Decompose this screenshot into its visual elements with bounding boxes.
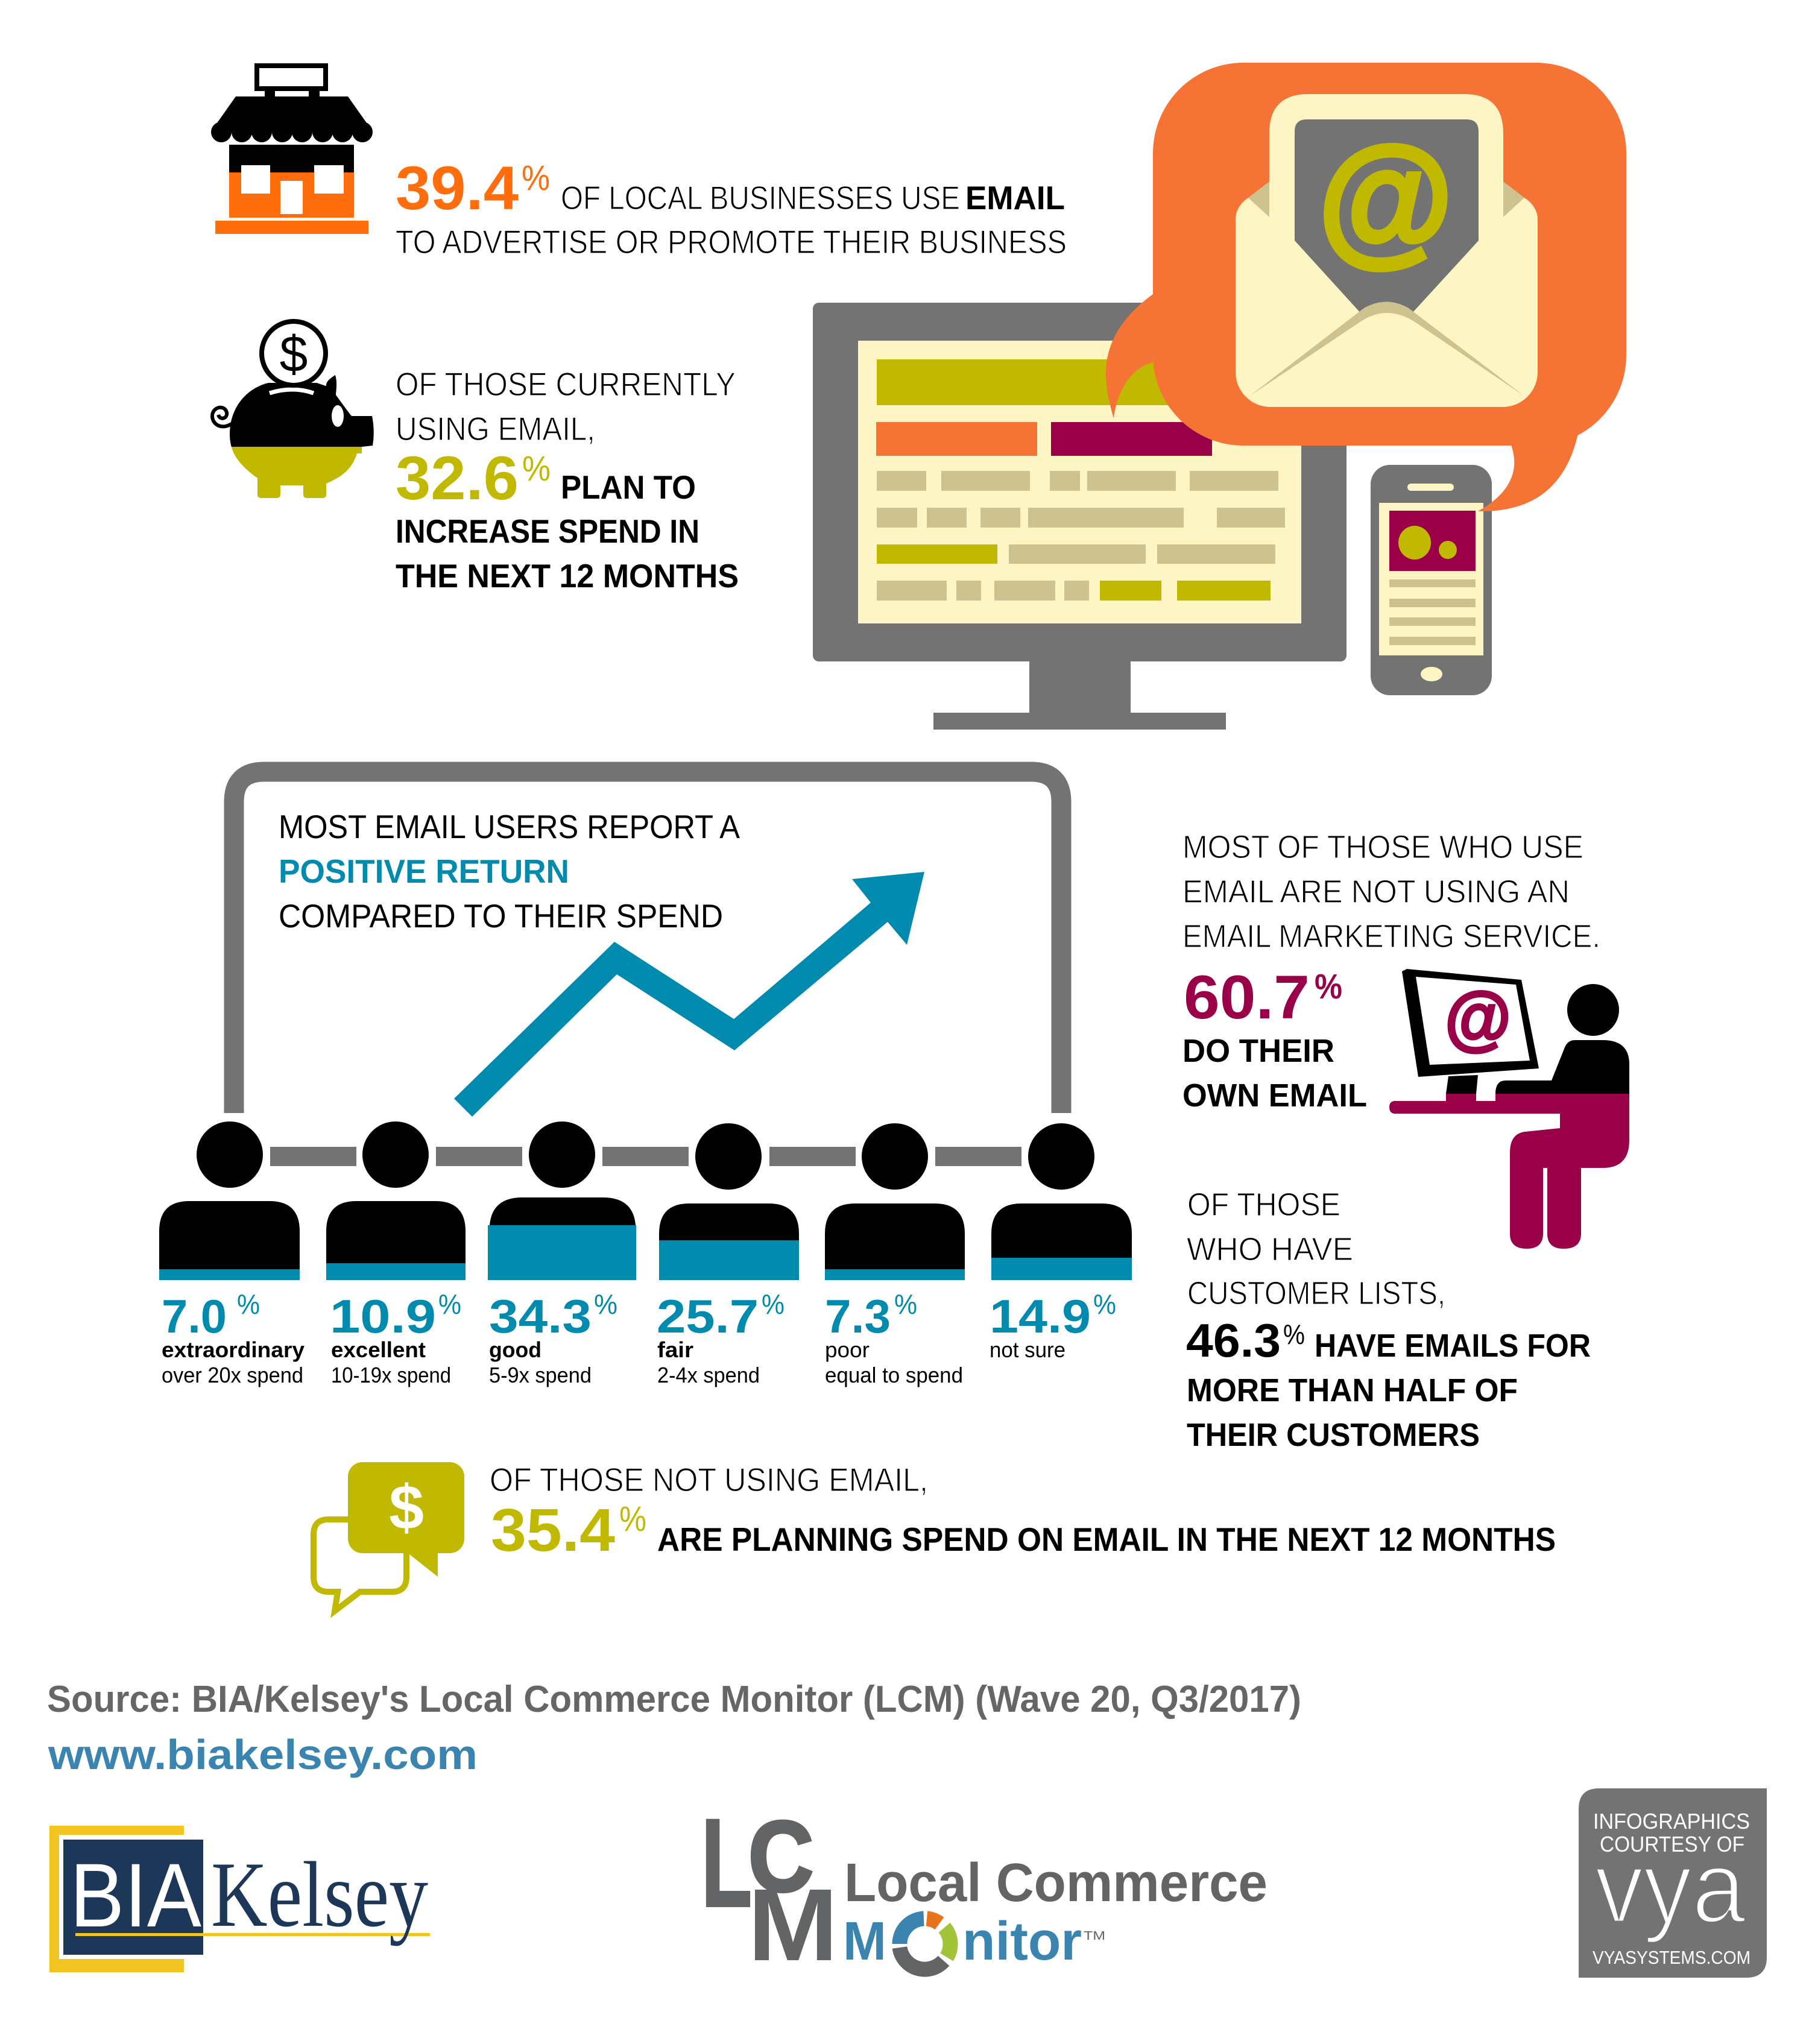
logo: Local Commerce Monitor: M — [748, 1868, 838, 1982]
logo: Local Commerce Monitor: Local Commerce — [844, 1853, 1268, 1913]
icon: storefront — [211, 66, 373, 234]
person: fair 25.7 percent: 25.7 — [657, 1290, 759, 1343]
stat: 46.3 percent have emails: MORE THAN HALF OF — [1187, 1372, 1518, 1408]
person: poor 7.3 percent: poor — [825, 1337, 870, 1362]
logo: VYA badge: VYASYSTEMS.COM — [1593, 1947, 1751, 1968]
person: extraordinary 7.0 percent: % — [237, 1289, 260, 1320]
stat: 46.3 percent have emails: THEIR CUSTOMERS — [1187, 1417, 1480, 1453]
logo: Local Commerce Monitor: C — [748, 1801, 813, 1913]
stat: 32.6 percent plan to increase: OF THOSE CURRENTLY — [396, 365, 736, 403]
stat: 39.4 percent use email: OF LOCAL BUSINESSES USE — [561, 179, 960, 216]
stat: 46.3 percent have emails: 46.3 — [1186, 1314, 1281, 1367]
icon: smartphone — [1371, 465, 1492, 695]
person: extraordinary 7.0 percent: 7.0 — [162, 1290, 227, 1343]
logo: Local Commerce Monitor: M — [843, 1911, 886, 1972]
logo: BIA Kelsey — [49, 1826, 430, 1972]
person: good 34.3 percent — [488, 1121, 636, 1387]
person: excellent 10.9 percent: 10-19x spend — [331, 1363, 451, 1387]
stat: 32.6 percent plan to increase: THE NEXT 12 MONTHS — [396, 557, 739, 595]
person: poor 7.3 percent — [825, 1123, 965, 1387]
person: fair 25.7 percent: % — [762, 1289, 785, 1320]
logo: Local Commerce Monitor: TM — [1084, 1929, 1105, 1943]
stat: 35.4 percent planning spend: ARE PLANNING SPEND ON EMAIL IN THE NEXT 12 MONTHS — [657, 1521, 1556, 1558]
stat: 46.3 percent have emails: CUSTOMER LISTS, — [1187, 1275, 1445, 1311]
person: poor 7.3 percent: % — [894, 1289, 917, 1320]
person: extraordinary 7.0 percent: extraordinary — [162, 1337, 305, 1362]
stat: 46.3 percent have emails: % — [1283, 1319, 1305, 1350]
person: not sure 14.9 percent — [990, 1123, 1132, 1362]
person: good 34.3 percent: good — [489, 1337, 541, 1362]
stat: 60.7 percent do their own email: 60.7 — [1184, 963, 1310, 1032]
stat: 35.4 percent planning spend: OF THOSE NOT USING EMAIL, — [490, 1461, 928, 1498]
logo: BIA Kelsey: BIA — [70, 1844, 201, 1946]
logo: VYA badge: INFOGRAPHICS — [1593, 1809, 1750, 1834]
logo: VYA badge: COURTESY OF — [1600, 1832, 1744, 1856]
icon: person at computer — [1389, 969, 1629, 1249]
icon: desktop monitor — [813, 303, 1346, 730]
heading: positive return: COMPARED TO THEIR SPEND — [279, 897, 723, 935]
person: excellent 10.9 percent: 10.9 — [330, 1290, 436, 1343]
logo: VYA badge: vya — [1595, 1830, 1746, 1945]
person: fair 25.7 percent: 2-4x spend — [657, 1363, 760, 1387]
person: not sure 14.9 percent: % — [1093, 1289, 1116, 1320]
arrow: rising trend — [454, 872, 924, 1117]
stat: 60.7 percent do their own email: % — [1315, 967, 1342, 1006]
stat: 32.6 percent plan to increase: % — [522, 449, 551, 488]
chart frame: presentation board — [234, 772, 1061, 1166]
stat: 46.3 percent have emails: OF THOSE — [1187, 1187, 1340, 1223]
source line: Source: BIA/Kelsey's Local Commerce Monitor (LCM) (Wave 20, Q3/2017) — [47, 1679, 1301, 1720]
person: fair 25.7 percent — [657, 1123, 799, 1387]
person: fair 25.7 percent: fair — [657, 1337, 693, 1362]
person: good 34.3 percent: % — [594, 1289, 617, 1320]
heading: positive return — [279, 808, 740, 935]
logo: Local Commerce Monitor: nitor — [962, 1911, 1082, 1972]
website link text: www.biakelsey.com — [48, 1731, 478, 1778]
heading: positive return: POSITIVE RETURN — [279, 853, 569, 890]
icon: orange speech bubble with envelope — [1106, 63, 1626, 511]
stat: 46.3 percent have emails: HAVE EMAILS FOR — [1315, 1328, 1591, 1364]
logo: VYA badge — [1579, 1788, 1767, 1978]
person: excellent 10.9 percent: % — [438, 1289, 461, 1320]
icon: chat bubbles with dollar — [314, 1462, 464, 1611]
stat: 39.4 percent use email: TO ADVERTISE OR PROMOTE THEIR BUSINESS — [396, 223, 1067, 260]
person: poor 7.3 percent: equal to spend — [825, 1363, 963, 1387]
stat: 60.7 percent do their own email: MOST OF THOSE WHO USE — [1182, 829, 1583, 865]
stat: 60.7 percent do their own email: EMAIL MARKETING SERVICE. — [1182, 918, 1600, 954]
icon: orange speech bubble with envelope: @ — [1318, 118, 1453, 278]
icon: chat bubbles with dollar: $ — [389, 1473, 424, 1543]
stat: 39.4 percent use email — [396, 154, 1067, 260]
person: extraordinary 7.0 percent — [159, 1121, 305, 1387]
stat: 32.6 percent plan to increase: PLAN TO — [561, 468, 696, 506]
person: poor 7.3 percent: 7.3 — [825, 1290, 891, 1343]
stat: 60.7 percent do their own email: OWN EMAIL — [1182, 1077, 1367, 1114]
icon: piggy bank: $ — [280, 326, 308, 382]
person: extraordinary 7.0 percent: over 20x spend — [162, 1363, 303, 1387]
stat: 46.3 percent have emails: WHO HAVE — [1187, 1231, 1353, 1267]
stat: 60.7 percent do their own email: EMAIL ARE NOT USING AN — [1182, 874, 1570, 910]
stat: 32.6 percent plan to increase: USING EMAIL, — [396, 410, 595, 447]
person: good 34.3 percent: 5-9x spend — [489, 1363, 592, 1387]
person: excellent 10.9 percent: excellent — [331, 1337, 426, 1362]
person: excellent 10.9 percent — [326, 1121, 466, 1387]
person: not sure 14.9 percent: 14.9 — [990, 1290, 1091, 1343]
heading: positive return: MOST EMAIL USERS REPORT A — [279, 808, 740, 845]
stat: 35.4 percent planning spend — [490, 1461, 1556, 1564]
stat: 32.6 percent plan to increase: INCREASE SPEND IN — [396, 513, 699, 550]
logo: Local Commerce Monitor — [701, 1793, 1268, 1982]
stat: 46.3 percent have emails — [1186, 1187, 1591, 1453]
logo: BIA Kelsey: Kelsey — [211, 1843, 428, 1946]
logo: Local Commerce Monitor: L — [701, 1793, 752, 1932]
stat: 32.6 percent plan to increase: 32.6 — [396, 444, 519, 513]
person: good 34.3 percent: 34.3 — [489, 1290, 592, 1343]
stat: 35.4 percent planning spend: % — [619, 1500, 646, 1539]
icon: person at computer: @ — [1445, 978, 1511, 1058]
stat: 39.4 percent use email: EMAIL — [965, 179, 1065, 216]
stat: 32.6 percent plan to increase — [396, 365, 739, 595]
stat: 60.7 percent do their own email — [1182, 829, 1600, 1114]
person: not sure 14.9 percent: not sure — [990, 1337, 1066, 1362]
stat: 39.4 percent use email: % — [522, 159, 550, 198]
stat: 35.4 percent planning spend: 35.4 — [491, 1497, 615, 1564]
stat: 39.4 percent use email: 39.4 — [396, 154, 519, 222]
icon: piggy bank — [212, 321, 374, 498]
stat: 60.7 percent do their own email: DO THEIR — [1182, 1033, 1334, 1069]
